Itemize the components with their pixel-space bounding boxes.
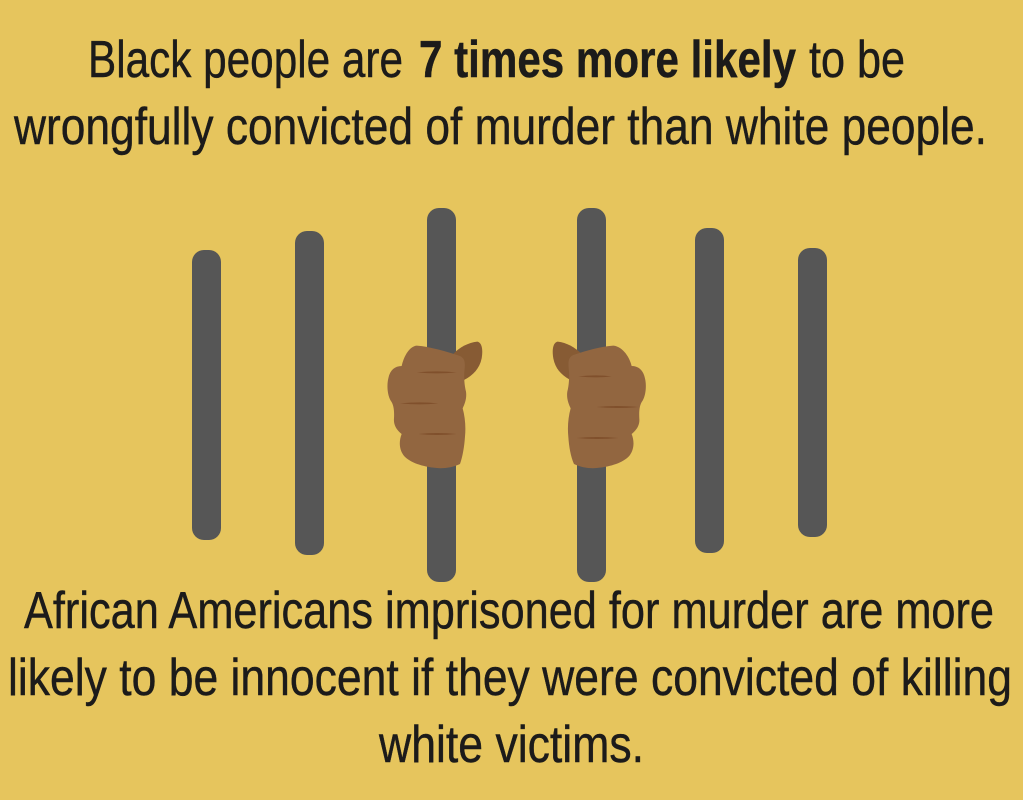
text block: innocence of African Americans imprisoned for murder: white victims. bbox=[378, 716, 644, 774]
heading: wrongful conviction statistic bbox=[13, 31, 987, 156]
heading: wrongful conviction statistic: to be bbox=[809, 31, 905, 89]
heading: wrongful conviction statistic: 7 times more likely bbox=[419, 31, 796, 89]
icon: right hand gripping bar bbox=[553, 342, 646, 468]
prison bars bbox=[192, 208, 827, 582]
illustration: prison bars with hands bbox=[192, 208, 827, 582]
heading: wrongful conviction statistic: Black people are bbox=[88, 31, 403, 89]
text block: innocence of African Americans imprisoned for murder bbox=[8, 582, 1012, 774]
icon: left hand gripping bar bbox=[387, 342, 482, 468]
